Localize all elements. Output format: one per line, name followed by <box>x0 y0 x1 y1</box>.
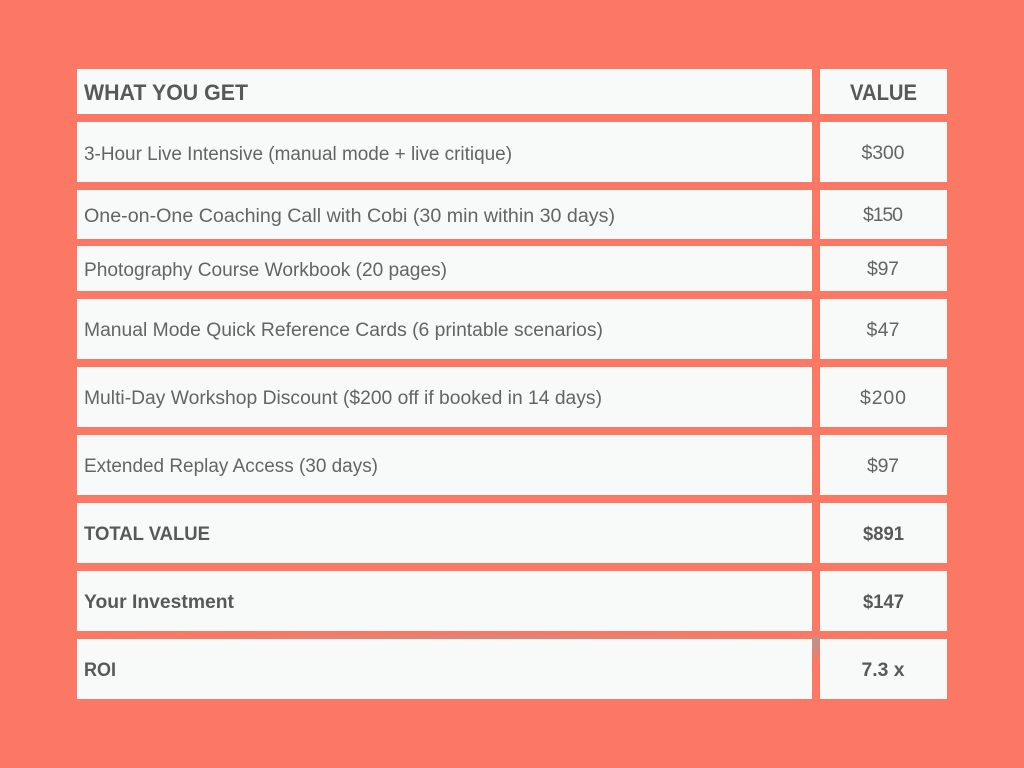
row: roi: 7.3 x <box>862 659 905 681</box>
row: live intensive: 3-Hour Live Intensive (manual mode + live critique) <box>84 144 512 165</box>
row: replay access: Extended Replay Access (30 days) <box>84 456 378 477</box>
heading: value: VALUE <box>850 80 917 105</box>
row: replay access <box>77 435 947 495</box>
row: roi: ROI <box>84 659 116 681</box>
row: workbook <box>77 246 947 291</box>
row: your investment: $147 <box>863 591 904 613</box>
row: total value <box>77 503 947 563</box>
row: reference cards: $47 <box>866 319 900 341</box>
heading: what you get: WHAT YOU GET <box>84 80 248 105</box>
row: your investment <box>77 571 947 631</box>
row: total value: $891 <box>863 523 904 545</box>
row: live intensive: $300 <box>862 142 905 164</box>
row: workshop discount: Multi-Day Workshop Discount ($200 off if booked in 14 days) <box>84 388 602 409</box>
row: your investment: Your Investment <box>84 591 234 613</box>
row: live intensive <box>77 122 947 182</box>
row: coaching call: $150 <box>863 204 903 226</box>
row: workshop discount <box>77 367 947 427</box>
header row <box>77 69 947 114</box>
row: total value: TOTAL VALUE <box>84 523 210 545</box>
row: reference cards: Manual Mode Quick Reference Cards (6 printable scenarios) <box>84 320 603 341</box>
row: reference cards <box>77 299 947 359</box>
row: coaching call: One-on-One Coaching Call with Cobi (30 min within 30 days) <box>84 206 615 227</box>
row: workbook: Photography Course Workbook (20 pages) <box>84 260 447 281</box>
row: replay access: $97 <box>867 455 899 477</box>
row: workbook: $97 <box>867 258 899 280</box>
row: roi <box>77 639 947 699</box>
row: coaching call <box>77 190 947 239</box>
row: workshop discount: $200 <box>860 387 906 409</box>
